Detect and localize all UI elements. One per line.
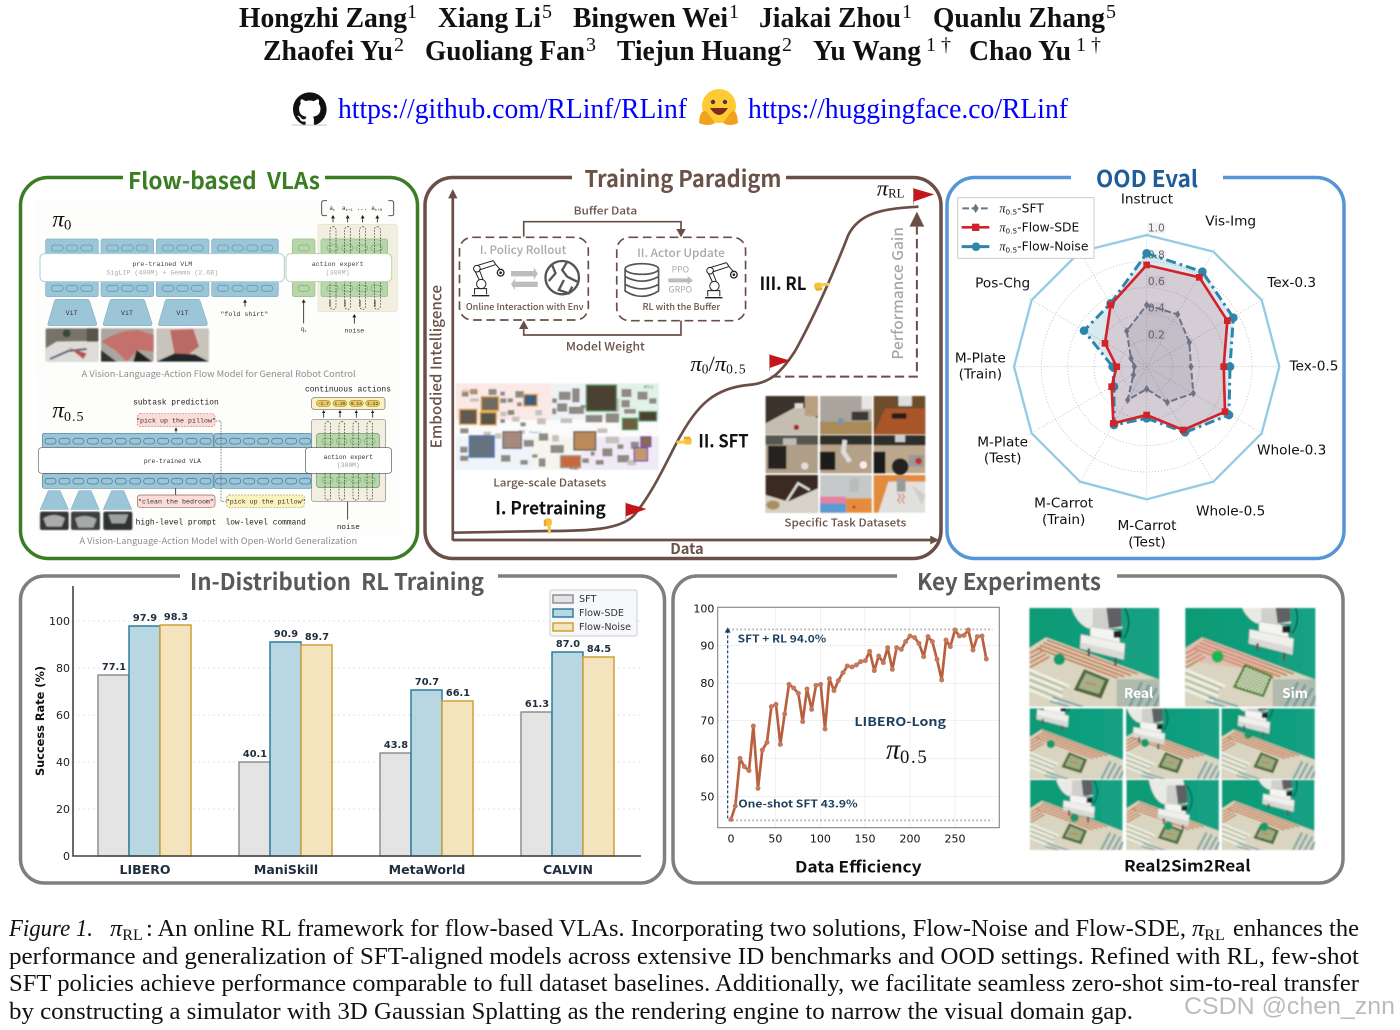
subheading: Data Efficiency: Data Efficiency	[795, 855, 922, 878]
author list: 2	[782, 34, 792, 56]
subtask prediction label: subtask prediction	[133, 398, 219, 407]
legend: π	[999, 202, 1006, 216]
panel: Key Experiments	[673, 563, 1343, 883]
bar chart	[33, 586, 641, 877]
prompt label: "fold shirt"	[220, 310, 268, 318]
figure caption: enhances the	[1233, 915, 1359, 942]
radar axis labels: M-Carrot	[1117, 518, 1177, 534]
x ticks: 200	[900, 833, 920, 846]
action values	[312, 398, 385, 409]
figure caption: by constructing a simulator with 3D Gaussian Splatting as the rendering engine to narrow the visual domain gap.	[9, 998, 1133, 1025]
line chart: data efficiency	[693, 602, 999, 878]
bars: ManiSkill	[239, 629, 332, 856]
high-level prompt label: high-level prompt	[136, 518, 216, 527]
image: large-scale dataset mosaic: RT-1	[644, 384, 654, 389]
label: pi0: π	[52, 207, 64, 233]
label: pi0.5: 0.5	[900, 747, 928, 768]
icon: hugging face	[699, 89, 738, 125]
y-axis ticks: 40	[56, 756, 70, 769]
ViT encoders: ViT	[176, 309, 188, 317]
flag: SFT	[770, 354, 790, 371]
tick labels: 0.2	[1148, 328, 1165, 341]
label: I. Pretraining: I. Pretraining	[495, 494, 606, 520]
axis label: Data: Data	[670, 538, 704, 559]
ViT encoders: ViT	[121, 309, 133, 317]
subheading: Real2Sim2Real: Real2Sim2Real	[1124, 854, 1251, 877]
label: pi0 / pi0.5: /	[708, 351, 715, 376]
radar axis labels: Pos-Chg	[975, 275, 1030, 291]
legend: π	[999, 221, 1006, 235]
small encoders	[40, 491, 132, 509]
diagram: pi0 and pi0.5 architectures	[35, 198, 398, 547]
radar axis labels: (Train)	[959, 367, 1002, 383]
flag: RL	[914, 188, 934, 204]
bars: MetaWorld: 66.1	[446, 688, 470, 699]
action expert box 0.5: (300M)	[337, 462, 360, 469]
box: actor update: RL with the Buffer	[643, 300, 720, 313]
group labels: ManiSkill	[254, 862, 318, 877]
arrow: model weight	[519, 320, 681, 355]
pre-trained VLA box	[38, 448, 310, 473]
bars: LIBERO: 98.3	[164, 612, 188, 623]
caption: pi0.5: A Vision-Language-Action Model with Open-World Generalization	[79, 535, 357, 547]
bars: MetaWorld	[380, 677, 473, 856]
panel: OOD Eval	[947, 160, 1344, 558]
radar chart	[955, 191, 1338, 550]
continuous actions label: continuous actions	[305, 386, 391, 395]
action brackets: a	[342, 205, 346, 212]
bars: CALVIN: 61.3	[525, 699, 549, 710]
bars: CALVIN: 87.0	[556, 639, 580, 650]
image: specific task dataset grid	[766, 396, 925, 513]
figure caption: RL	[122, 927, 143, 944]
bar legend: Flow-SDE	[579, 608, 624, 619]
radar axis labels	[955, 191, 1338, 550]
box: actor update: PPO	[672, 264, 689, 276]
photo: Sim: Sim	[1282, 682, 1308, 702]
bars: ManiSkill: 90.9	[274, 629, 298, 640]
panel: Flow-based VLAs	[20, 162, 418, 558]
flow loops 0.5	[322, 410, 374, 520]
author list: 5	[542, 1, 552, 23]
action expert backdrop	[318, 224, 397, 312]
heading: Flow-based VLAs: Flow-based VLAs	[128, 162, 320, 196]
action expert backdrop 0.5	[312, 419, 386, 502]
author list: Jiakai Zhou	[759, 3, 901, 34]
author list: 1	[407, 1, 417, 23]
hand: RL	[814, 282, 830, 291]
legend: -Flow-Noise	[1017, 240, 1088, 254]
y-axis ticks: 80	[56, 662, 70, 675]
author list: Bingwen Wei	[573, 3, 728, 34]
legend: 0.5	[1006, 227, 1018, 236]
caption: pi0: A Vision-Language-Action Flow Model for General Robot Control	[82, 368, 356, 380]
author list: Guoliang Fan	[425, 36, 585, 67]
y-axis ticks: 100	[49, 615, 70, 628]
radar axis labels: Tex-0.3	[1266, 275, 1316, 291]
box: actor update	[617, 237, 746, 321]
group labels: LIBERO	[120, 862, 170, 877]
group labels	[120, 862, 593, 877]
paradigm diagram	[426, 176, 939, 559]
legend: -Flow-SDE	[1017, 221, 1079, 235]
bars: CALVIN: 84.5	[587, 644, 611, 655]
y ticks: 70	[700, 714, 714, 727]
pre-trained VLM box: SigLIP (400M) + Gemma (2.6B)	[106, 269, 218, 277]
ViT encoders: ViT	[66, 309, 78, 317]
bars: LIBERO: 77.1	[102, 662, 126, 673]
watermark: CSDN @chen_znn	[1184, 993, 1395, 1020]
bars: LIBERO: 97.9	[133, 613, 157, 624]
annotation: One-shot SFT: One-shot SFT 43.9%	[738, 796, 858, 811]
noise label: noise	[344, 327, 364, 335]
author list: Hongzhi Zang	[239, 3, 407, 34]
author list: Quanlu Zhang	[933, 3, 1105, 34]
links row	[292, 89, 1068, 125]
author list: Xiang Li	[438, 3, 541, 34]
figure caption: : An online RL framework for flow-based VLAs. Incorporating two solutions, Flow-Noise and Flow-SDE,	[146, 915, 1186, 942]
author list: 1	[729, 1, 739, 23]
tick labels: 0.4	[1148, 302, 1165, 315]
radar axis labels: (Test)	[984, 450, 1021, 466]
outer polygon	[1014, 235, 1279, 499]
label: LIBERO-Long: LIBERO-Long	[854, 712, 947, 730]
action brackets: t	[333, 209, 335, 213]
dashed connector	[216, 421, 227, 502]
box: policy rollout: Online Interaction with Env	[466, 300, 584, 313]
blue token blocks	[46, 239, 278, 297]
figure caption: performance and generalization of SFT-aligned models across extensive ID benchmarks and OOD settings. Refined with RL, few-shot	[9, 943, 1359, 970]
action values: 0.14	[351, 401, 362, 407]
box: actor update: GRPO	[669, 284, 692, 296]
box: policy rollout: I. Policy Rollout	[480, 242, 567, 258]
box: actor update: II. Actor Update	[637, 245, 725, 261]
tick labels: 0.8	[1148, 248, 1165, 261]
y ticks: 100	[693, 602, 714, 615]
author list: 1	[902, 1, 912, 23]
action values: 1.26	[334, 401, 346, 407]
figure caption: SFT policies achieve performance comparable to full dataset baselines. Additionally, we facilitate seamless zero-shot sim-to-real transfer	[9, 970, 1359, 997]
bar legend: Flow-Noise	[579, 622, 631, 633]
pre-trained VLM box	[40, 254, 284, 282]
box: policy rollout	[459, 237, 588, 320]
bars: ManiSkill: 40.1	[243, 749, 267, 760]
author list: Chao Yu	[969, 36, 1071, 67]
author list: 1 †	[926, 34, 951, 56]
tick labels: 1.0	[1148, 222, 1165, 235]
author list: 5	[1106, 1, 1116, 23]
action expert box: (300M)	[326, 269, 350, 277]
figure caption: RL	[1204, 927, 1225, 944]
group labels: CALVIN	[543, 862, 593, 877]
action values: -1.7	[318, 401, 329, 407]
action expert box 0.5: action expert	[324, 454, 373, 461]
tick labels	[1147, 222, 1166, 341]
annotation: SFT + RL: SFT + RL 94.0%	[738, 631, 826, 646]
axis label: Embodied Intelligence: Embodied Intelligence	[426, 285, 447, 448]
action values: 1.42	[367, 401, 378, 407]
flag: pretraining	[626, 502, 647, 519]
camera photos pi0	[46, 328, 209, 362]
x ticks: 50	[768, 833, 782, 846]
radar axis labels: M-Plate	[977, 435, 1028, 451]
radar axis labels: M-Plate	[955, 351, 1006, 367]
heading: In-Distribution RL Training: In-Distribution RL Training	[190, 563, 484, 597]
label: III. RL: III. RL	[760, 270, 806, 296]
y-axis ticks: 0	[63, 850, 70, 863]
author list: Yu Wang	[813, 36, 921, 67]
axes	[448, 189, 939, 544]
heading: Training Paradigm: Training Paradigm	[584, 160, 782, 194]
image: large-scale dataset mosaic	[456, 383, 659, 470]
label: pi0 / pi0.5: 0	[702, 362, 709, 377]
github link: https://github.com/RLinf/RLinf	[338, 94, 687, 125]
bars: LIBERO	[98, 612, 191, 856]
figure caption: π	[110, 915, 122, 942]
photo: Real: Real	[1124, 682, 1153, 702]
label: II. SFT: II. SFT	[698, 428, 749, 454]
label: pi0 / pi0.5: 0.5	[726, 362, 747, 377]
radar axis labels: M-Carrot	[1034, 496, 1094, 512]
subtask box	[136, 414, 216, 427]
author list: 2	[394, 34, 404, 56]
series: Flow-SDE	[1102, 262, 1231, 433]
action expert box	[286, 254, 392, 282]
legend: 0.5	[1006, 246, 1018, 255]
figure caption: Figure 1.	[8, 915, 93, 942]
y ticks	[693, 602, 714, 803]
label: Performance Gain: Performance Gain	[887, 227, 908, 360]
label: pi0.5: 0.5	[64, 410, 85, 425]
noise label 0.5: noise	[337, 524, 360, 532]
ViT encoders	[48, 299, 207, 326]
pre-trained VLM box: pre-trained VLM	[132, 260, 192, 268]
radar axis labels: Vis-Img	[1205, 214, 1256, 230]
low-level command box: "pick up the pillow"	[226, 497, 306, 505]
action expert box: action expert	[312, 260, 364, 268]
bars: MetaWorld: 70.7	[415, 677, 439, 688]
arrow: buffer data	[524, 204, 686, 237]
bars: CALVIN	[521, 639, 614, 856]
performance curve	[453, 207, 919, 533]
blue tokens 0.5	[42, 433, 312, 488]
bars: MetaWorld: 43.8	[384, 740, 408, 751]
radar axis labels: (Train)	[1042, 512, 1085, 528]
arrow: model weight: Model Weight	[566, 338, 645, 355]
image: large-scale dataset mosaic: QT-Opt	[462, 388, 477, 393]
low-level command box	[226, 495, 306, 507]
green tokens 0.5	[317, 433, 379, 488]
radar axis labels: Instruct	[1121, 191, 1174, 207]
action brackets: t+H	[375, 209, 383, 213]
photo: Real	[1029, 588, 1160, 707]
axes	[73, 586, 641, 856]
radar axis labels: (Test)	[1128, 534, 1166, 550]
y ticks: 60	[700, 752, 714, 765]
photo: Sim	[1185, 583, 1316, 707]
heading: OOD Eval: OOD Eval	[1096, 160, 1198, 194]
photo frames: sequence	[1021, 676, 1315, 850]
panel: In-Distribution RL Training	[20, 563, 664, 883]
x ticks: 0	[727, 833, 734, 846]
y ticks: 50	[700, 790, 714, 803]
high-level prompt box: "clean the bedroom"	[138, 497, 214, 505]
image: large-scale dataset mosaic: Bridge	[570, 466, 579, 470]
low-level command label: low-level command	[225, 518, 306, 527]
icon: github	[292, 92, 327, 125]
data line	[731, 630, 986, 819]
action brackets: a	[329, 205, 333, 212]
series: Flow-Noise	[1080, 249, 1238, 437]
y-axis ticks	[49, 615, 70, 863]
heading: Key Experiments: Key Experiments	[917, 563, 1101, 597]
pre-trained VLA box: pre-trained VLA	[144, 458, 201, 465]
image: large-scale dataset mosaic: Push-T	[530, 430, 542, 434]
author list	[239, 1, 1116, 67]
series: SFT	[1124, 301, 1196, 406]
hand: SFT	[676, 437, 692, 445]
label: Specific Task Datasets: Specific Task Datasets	[784, 515, 906, 531]
label: pi0.5: π	[52, 398, 64, 424]
camera photos pi0.5	[40, 512, 132, 530]
action brackets: t+1	[346, 209, 353, 213]
bar legend	[550, 590, 637, 636]
label: Large-scale Datasets: Large-scale Datasets	[493, 475, 606, 491]
q_t label: t	[304, 330, 307, 334]
label: pi0: 0	[64, 217, 71, 233]
radar axis labels: Whole-0.5	[1196, 504, 1265, 520]
x ticks: 150	[855, 833, 875, 846]
author list: 3	[586, 34, 596, 56]
arrow: buffer data: Buffer Data	[574, 204, 637, 219]
label: pi0 / pi0.5: π	[715, 351, 726, 376]
legend: -SFT	[1017, 202, 1044, 216]
x ticks: 100	[810, 833, 831, 846]
author list: 1 †	[1076, 34, 1101, 56]
label: pi RL: RL	[888, 187, 904, 201]
figure caption	[8, 915, 1359, 1025]
performance gain arrow	[771, 212, 924, 377]
radar axis labels: Whole-0.3	[1257, 442, 1326, 458]
action expert box 0.5	[305, 448, 392, 473]
action brackets: a	[371, 205, 375, 212]
photo grid: real2sim2real	[1021, 583, 1316, 877]
panel: Training Paradigm	[425, 160, 941, 559]
x ticks: 250	[945, 833, 965, 846]
action brackets	[322, 201, 394, 216]
flow loops	[243, 215, 380, 324]
bars: ManiSkill: 89.7	[305, 632, 329, 643]
subtask arrows	[174, 427, 178, 495]
legend: π	[999, 240, 1006, 254]
gain arrow	[725, 627, 731, 818]
y-axis ticks: 20	[56, 803, 70, 816]
y ticks: 80	[700, 677, 714, 690]
figure caption: π	[1192, 915, 1204, 942]
y-axis ticks: 60	[56, 709, 70, 722]
action brackets: ...	[357, 205, 367, 212]
x ticks	[727, 833, 965, 846]
label: pi0 / pi0.5: π	[690, 351, 702, 376]
label: pi RL: π	[877, 176, 888, 201]
y-axis title: Success Rate (%)	[33, 666, 47, 776]
label: pi0.5: π	[886, 734, 900, 765]
subtask box: "pick up the pillow"	[136, 416, 216, 424]
radar axis labels: Tex-0.5	[1289, 359, 1338, 375]
q_t label: q	[301, 326, 304, 333]
tick labels: 0.6	[1148, 275, 1165, 288]
legend: 0.5	[1006, 208, 1018, 217]
legend	[958, 198, 1094, 258]
y ticks: 90	[700, 639, 714, 652]
green token blocks	[292, 239, 388, 297]
bar legend: SFT	[579, 594, 596, 605]
hand: pretraining	[544, 518, 552, 534]
radar grid	[1012, 232, 1282, 503]
author list: Tiejun Huang	[617, 36, 781, 67]
group labels: MetaWorld	[389, 862, 465, 877]
high-level prompt box	[137, 495, 215, 507]
author list: Zhaofei Yu	[263, 36, 393, 67]
huggingface link: https://huggingface.co/RLinf	[748, 94, 1068, 125]
